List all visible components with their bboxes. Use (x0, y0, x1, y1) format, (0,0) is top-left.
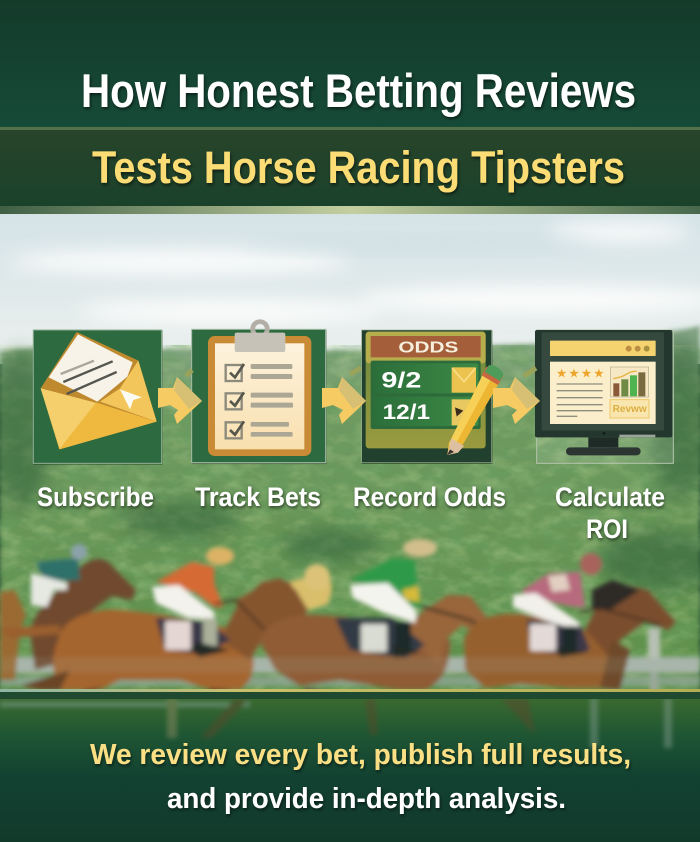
step label: Calculate ROI (555, 482, 665, 544)
background photo: treeline (0, 325, 700, 700)
mini chart (610, 367, 649, 397)
background photo: grass and footer fade (0, 698, 700, 842)
letter (49, 334, 133, 402)
far left horse (0, 590, 26, 680)
step label: Track Bets: Track Bets (195, 482, 321, 512)
header band (0, 0, 700, 214)
panel: subscribe envelope icon (33, 330, 162, 463)
arrow: track bets to record odds (322, 368, 366, 424)
footer text line 1: We review every bet, publish full results, (90, 739, 631, 771)
panel: record odds board icon: ODDS (398, 339, 459, 356)
browser bar (550, 341, 656, 356)
board (208, 336, 311, 456)
panel: record odds board icon (362, 330, 503, 463)
panel: track bets clipboard icon (192, 322, 326, 463)
translucent fence over horses (0, 657, 700, 673)
background photo: racing horses and jockeys (0, 539, 700, 730)
back horse, teal jockey (30, 544, 136, 670)
arrow: subscribe to track bets (158, 370, 202, 424)
review button (610, 400, 649, 418)
horse 3 (464, 553, 676, 706)
monitor (535, 330, 672, 437)
envelope front (100, 361, 157, 422)
panel: calculate ROI monitor icon: ★★★★ (556, 366, 605, 380)
envelope back (41, 332, 157, 422)
title line 2: Tests Horse Racing Tipsters (92, 142, 625, 193)
yellow jockey behind (236, 564, 332, 640)
selection boxes (452, 367, 476, 393)
background photo: sky (0, 214, 700, 364)
checklist (226, 365, 242, 438)
step label: Subscribe: Subscribe (37, 482, 154, 512)
step label: Calculate ROI: ROI (586, 514, 628, 544)
footer divider line (0, 689, 700, 699)
row 9/2 (371, 361, 481, 429)
arrow: record odds to calculate ROI (493, 368, 540, 424)
clip (253, 322, 267, 336)
stand (588, 437, 618, 447)
panel: calculate ROI monitor icon (535, 330, 673, 463)
panel: calculate ROI monitor icon: Revww (613, 404, 647, 415)
pencil (447, 367, 503, 455)
step label: Calculate ROI: Calculate (555, 482, 665, 512)
panel: record odds board icon: 12/1 (383, 400, 430, 424)
review page (550, 362, 656, 424)
cursor (120, 389, 142, 409)
footer text line 2: and provide in-depth analysis. (167, 783, 566, 815)
row 12/1 (373, 397, 478, 426)
odds header (371, 336, 481, 357)
fence rails (0, 628, 700, 700)
step label: Record Odds: Record Odds (353, 482, 506, 512)
panel: record odds board icon: 9/2 (381, 367, 421, 392)
horse 2 (259, 539, 496, 730)
horse 1 (0, 547, 308, 728)
